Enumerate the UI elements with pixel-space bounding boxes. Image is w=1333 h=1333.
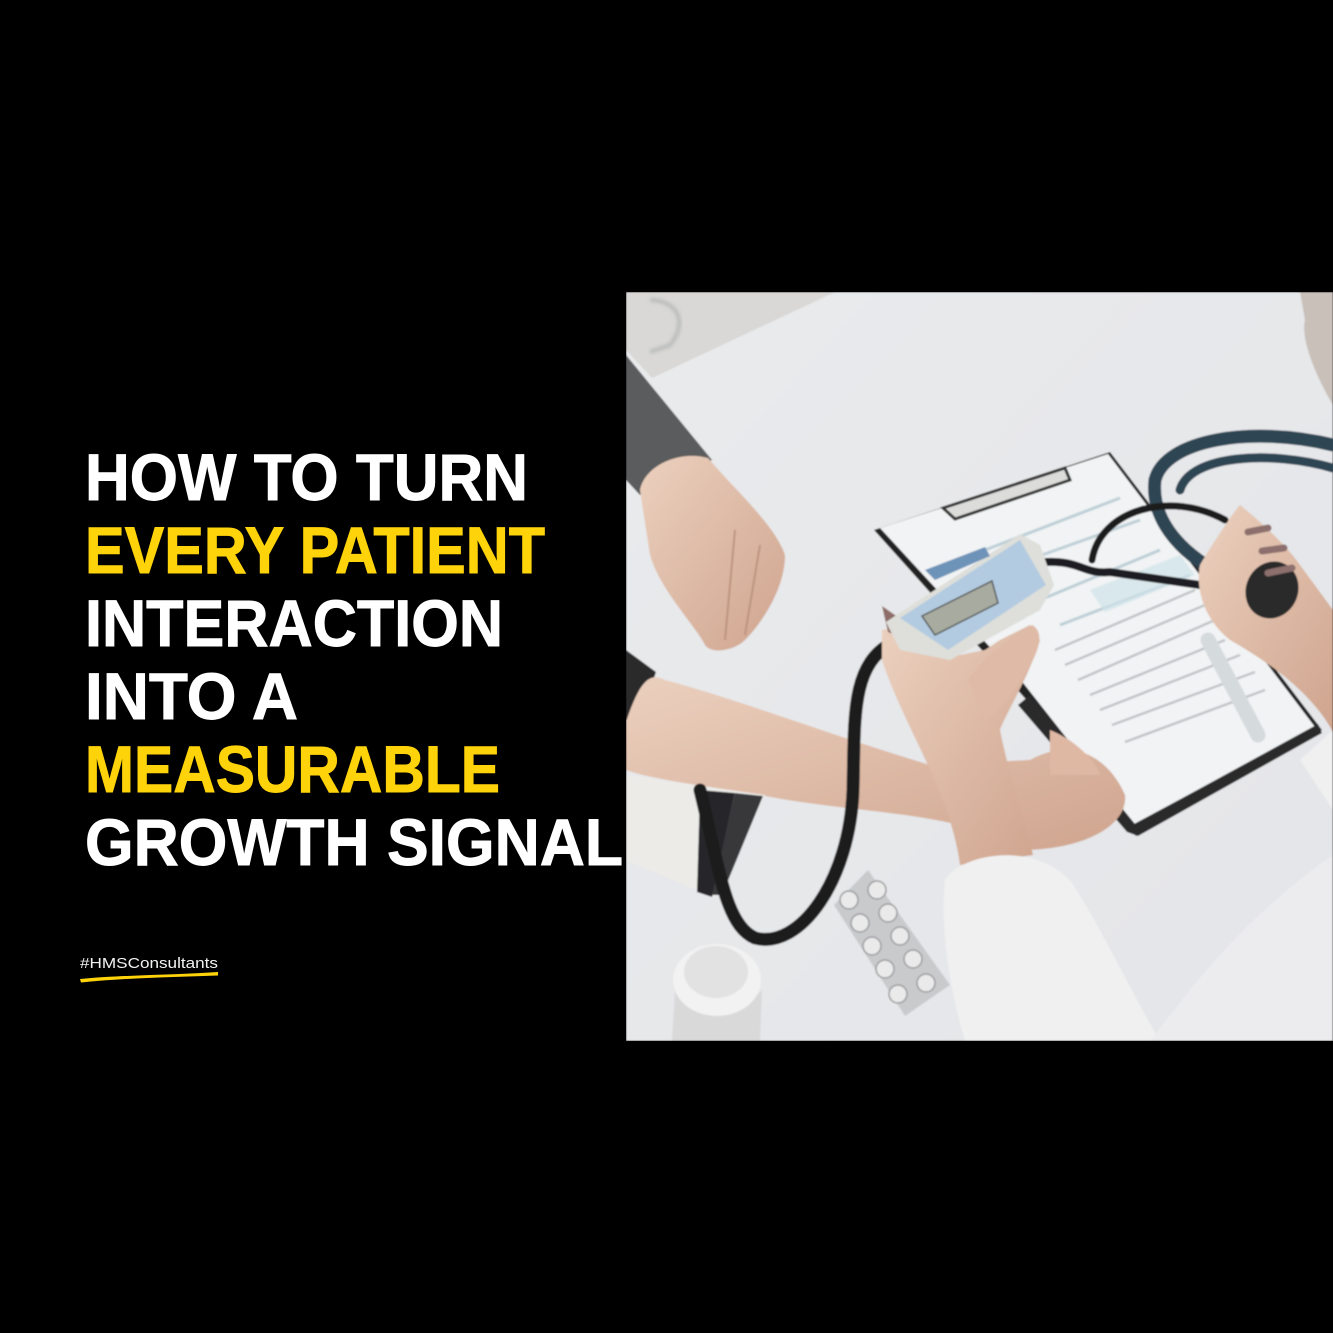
title: GROWTH SIGNAL [85,805,623,879]
left sleeve and hand [626,355,785,650]
BP monitor [886,534,1054,660]
clipboard [874,452,1322,836]
title: INTO A [85,659,298,733]
cuff hose [700,643,892,939]
patient forearm [626,650,1125,850]
doctor hand [882,606,1040,865]
clip [943,468,1070,519]
pill bottle [672,944,762,1041]
title: HOW TO TURN [85,440,528,514]
coat sleeve [944,730,1333,1041]
table surface [626,292,1333,1041]
title [85,440,623,879]
stethoscope tube [1045,436,1333,735]
pill blister [834,870,950,1016]
notebook [696,790,766,898]
hashtag with underline [80,955,218,982]
title: MEASURABLE [85,732,500,806]
document text [985,498,1190,625]
photo: blood pressure check on a white table [626,292,1333,1041]
title: EVERY PATIENT [85,513,545,587]
hashtag with underline: #HMSConsultants [80,955,218,972]
right hand and bulb [1199,292,1333,732]
background behind table [626,292,835,378]
doctor fingers over monitor [1030,624,1040,654]
title: INTERACTION [85,586,503,660]
